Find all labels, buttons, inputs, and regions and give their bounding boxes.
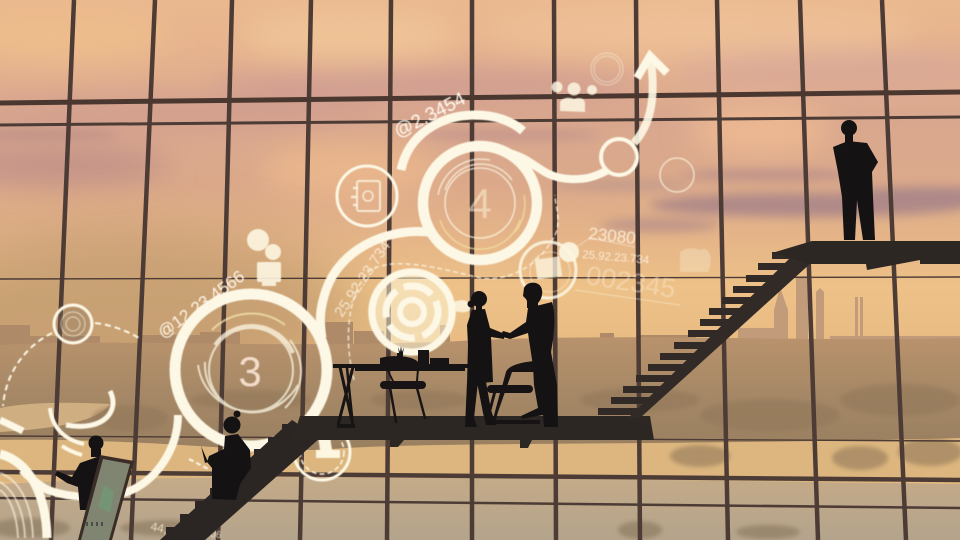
upper platform — [772, 241, 960, 270]
left staircase — [160, 420, 320, 540]
right staircase — [598, 252, 816, 418]
faint circle top — [591, 53, 623, 85]
chair at desk — [380, 356, 426, 423]
flow line under ring 3 — [22, 415, 178, 497]
ring 4 with flow line and arrow — [423, 56, 667, 260]
background: land and river — [0, 337, 960, 540]
woman silhouette — [465, 291, 505, 427]
number 4: 4 — [468, 180, 492, 227]
faint heart icon — [680, 248, 711, 272]
icon: idea bubbles and monitor — [247, 229, 281, 286]
desk with items — [333, 346, 469, 428]
bottom small labels — [149, 519, 222, 540]
number 3: 3 — [238, 348, 262, 395]
icon: people group — [552, 82, 597, 112]
target ring — [368, 268, 470, 356]
arc from ring 4 to ring 3 — [320, 232, 428, 338]
concentric arc fragments — [0, 391, 113, 455]
dash fragment — [189, 459, 210, 470]
arc above ring 4 — [401, 115, 523, 170]
data labels: 23080 — [588, 224, 637, 248]
main platform — [292, 416, 654, 448]
presenting man — [55, 436, 104, 510]
data labels: 002345 — [584, 260, 678, 304]
ring under stairs — [294, 424, 350, 480]
big ring at bottom left — [0, 454, 47, 538]
man silhouette — [500, 283, 558, 427]
bottom small labels: 44, — [149, 519, 169, 536]
digital overlay graphics — [0, 53, 711, 540]
presentation board — [78, 455, 134, 540]
seated woman with laptop — [201, 410, 251, 500]
icon: address book ring — [337, 166, 397, 226]
city skyline and factories — [0, 276, 960, 357]
small ring with dashed arcs — [3, 305, 139, 406]
dashed arc around target ring — [348, 195, 558, 380]
data labels: 25.92.23.734 — [582, 249, 650, 267]
data labels — [582, 224, 678, 304]
standing man top right — [833, 120, 878, 240]
right data cluster: mail ring — [520, 242, 579, 298]
chair by man — [485, 361, 540, 424]
label: @2.3454: @2.3454 — [391, 88, 470, 142]
data label leader lines — [575, 238, 680, 305]
label: @12.23.4566: @12.23.4566 — [154, 267, 248, 342]
ring 3 — [175, 294, 327, 446]
faint circle right — [660, 158, 694, 192]
label: 25.92.23.734 rotated: 25.92.23.734 — [331, 238, 394, 320]
